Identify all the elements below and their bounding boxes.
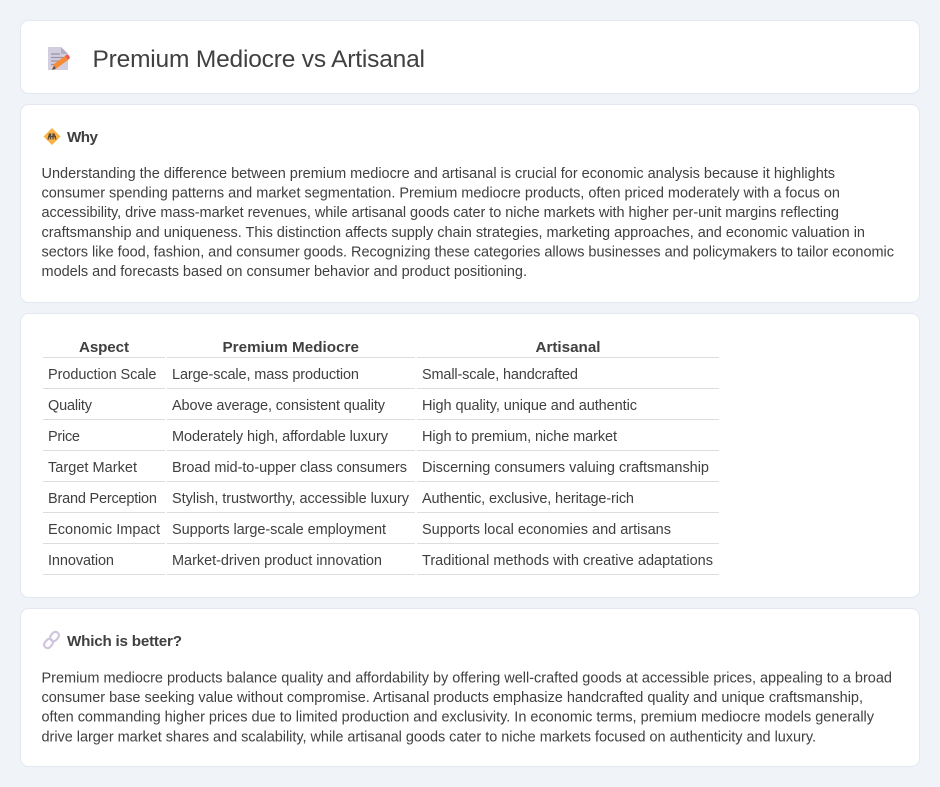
table row: quality: Above average, consistent quality [172,398,386,414]
table row: target market [43,460,719,482]
table row: price: Price [48,429,80,445]
table row: brand perception [43,491,719,513]
table header row [43,339,719,358]
table row: brand perception: Stylish, trustworthy, accessible luxury [172,491,410,507]
table header row: Premium Mediocre [222,339,359,356]
table row: price [43,429,719,451]
icon: diamond sign [44,128,60,145]
table row: innovation: Market-driven product innovation [172,553,382,569]
table row: quality: Quality [48,398,93,414]
heading: which is better: Which is better? [67,633,182,650]
table header row: Aspect [79,339,129,356]
table row: innovation: Traditional methods with creative adaptations [422,553,713,569]
table row: brand perception: Brand Perception [48,491,157,507]
text block: which is better paragraph: drive larger market shares and scalability, while artisanal goods cater to niche markets focused on authenticity and luxury. [42,729,816,745]
table row: innovation: Innovation [48,553,114,569]
text block: which is better paragraph: Premium mediocre products balance quality and affordability by offering well-crafted goods at accessible prices, appealing to a broad [42,670,892,686]
table row: brand perception: Authentic, exclusive, heritage-rich [422,491,634,507]
table header row: Artisanal [536,339,600,356]
table row: price: High to premium, niche market [422,429,617,445]
table row: production scale: Large-scale, mass production [172,367,359,383]
text block: which is better paragraph: consumer base seeking value without compromise. Artisanal products emphasize handcrafted quality and unique craftsmanship, [42,690,863,706]
heading: why: Why [67,129,99,146]
table row: production scale: Small-scale, handcrafted [422,367,578,383]
text block: why paragraph [42,166,894,280]
table row: economic impact: Economic Impact [48,522,160,538]
text block: which is better paragraph [42,670,892,745]
icon: chain link [43,630,60,650]
table row: economic impact [43,522,719,544]
panel: comparison table [20,314,920,598]
table row: innovation [43,553,719,575]
text block: why paragraph: consumer spending patterns and market segmentation. Premium mediocre products, often priced moderately with a focus on [42,186,840,202]
table row: production scale: Production Scale [48,367,156,383]
table row: target market: Broad mid-to-upper class consumers [172,460,407,476]
text block: why paragraph: models and forecasts based on consumer behavior and product positioning. [42,264,527,280]
table row: target market: Discerning consumers valuing craftsmanship [422,460,709,476]
text block: why paragraph: accessibility, drive mass-market revenues, while artisanal goods cater to niche markets with higher per-unit margins reflecting [42,205,839,221]
text block: why paragraph: craftsmanship and uniqueness. This distinction affects supply chain strategies, marketing approaches, and economic valuation in [42,225,865,241]
table row: quality: High quality, unique and authentic [422,398,637,414]
table row: target market: Target Market [48,460,137,476]
title: Premium Mediocre vs Artisanal [92,46,425,73]
icon: document with pencil [48,47,70,70]
panel: which is better [20,608,920,766]
text block: why paragraph: sectors like food, fashion, and consumer goods. Recognizing these categories allows businesses and policymakers to tailor economic [42,244,894,260]
table row: production scale [43,367,719,389]
text block: which is better paragraph: often commanding higher prices due to limited production and exclusivity. In economic terms, premium mediocre models generally [42,710,875,726]
panel: why [20,104,920,302]
text block: why paragraph: Understanding the difference between premium mediocre and artisanal is crucial for economic analysis because it highlights [42,166,835,182]
table row: quality [43,398,719,420]
table row: price: Moderately high, affordable luxury [172,429,389,445]
panel: header [20,20,920,94]
table row: economic impact: Supports local economies and artisans [422,522,671,538]
table row: economic impact: Supports large-scale employment [172,522,386,538]
